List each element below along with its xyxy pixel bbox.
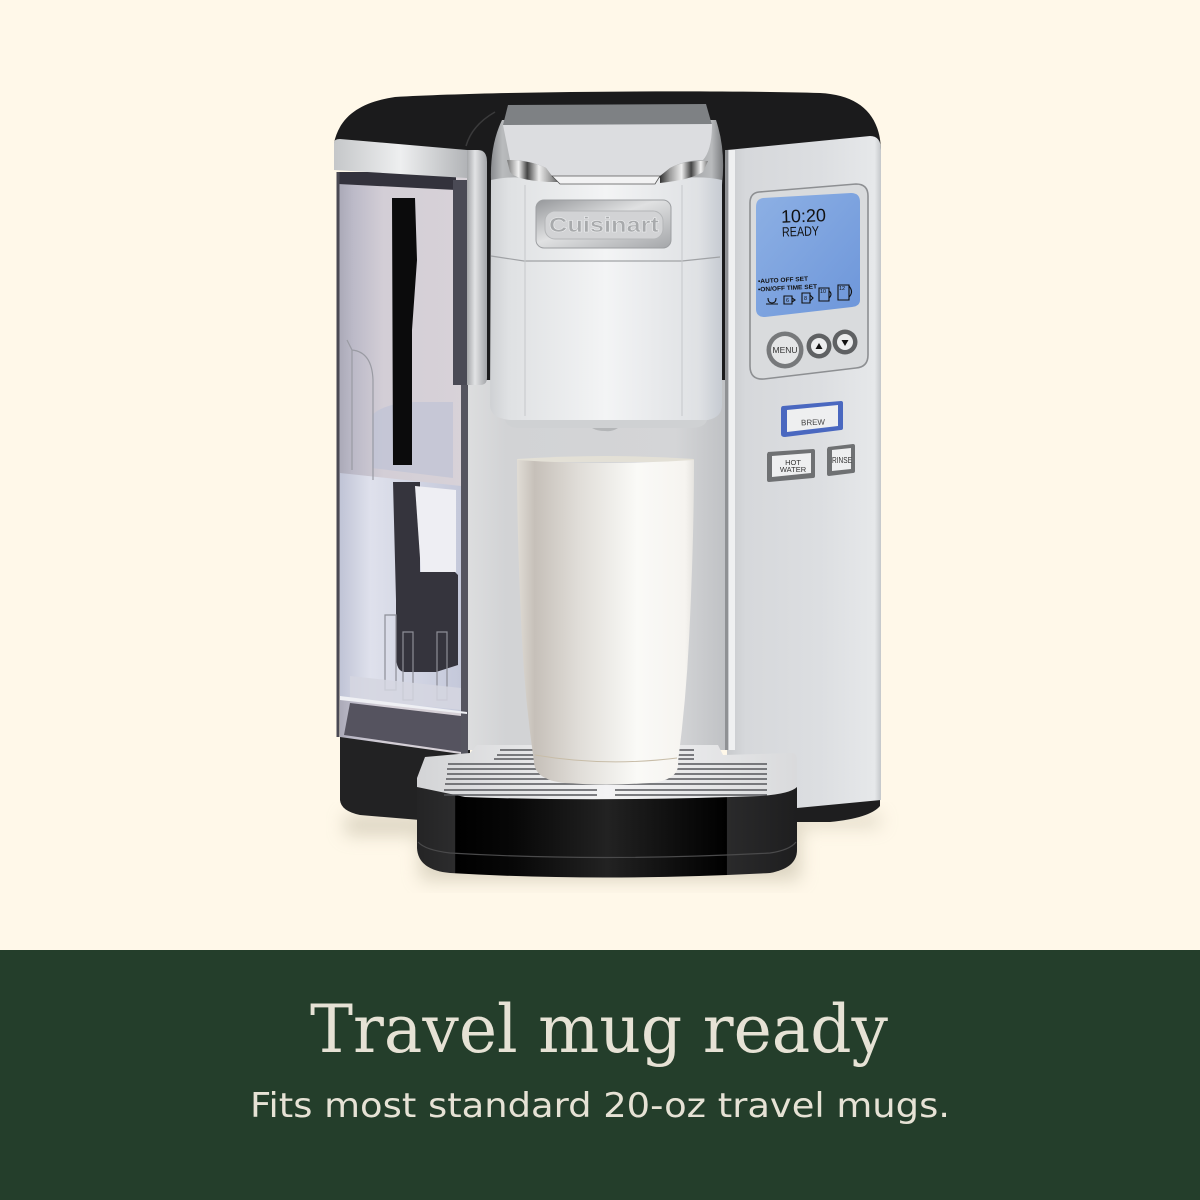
chrome lip left (507, 160, 565, 182)
head body (490, 177, 722, 420)
housing curve highlight (466, 112, 495, 146)
chrome lip right (660, 161, 708, 183)
clock: 10:20 (781, 205, 826, 227)
drip tray (417, 745, 797, 878)
heading: Travel mug ready (310, 991, 889, 1068)
rinse button: RINSE (832, 456, 852, 465)
hot water button (767, 449, 815, 482)
menu button (766, 332, 804, 368)
cup size numbers: 10 (820, 289, 826, 295)
water upper haze (372, 402, 453, 478)
logo badge (536, 200, 671, 248)
tray front (417, 787, 797, 878)
water volume (340, 473, 461, 712)
logo badge: Cuisinart (549, 214, 659, 237)
background (0, 0, 1200, 950)
subheading: Fits most standard 20-oz travel mugs. (250, 1086, 950, 1126)
left top metal band (334, 139, 467, 178)
water tank (338, 172, 468, 755)
LCD screen (756, 193, 860, 317)
auto off label: •AUTO OFF SET (758, 276, 808, 285)
black top housing (334, 91, 881, 385)
mug rim (517, 456, 694, 462)
spout (505, 420, 707, 428)
cup size icons (766, 285, 852, 304)
down button (832, 330, 858, 354)
head seam (491, 256, 720, 261)
center silver backplate (466, 380, 728, 750)
cup size numbers: 6 (786, 298, 789, 304)
black base left (340, 730, 470, 820)
up button (806, 334, 832, 358)
mug body (517, 460, 694, 784)
travel mug (517, 456, 694, 784)
rinse button (827, 444, 855, 476)
menu button: MENU (772, 345, 798, 355)
cup size numbers: 12 (839, 286, 845, 292)
grate lines (444, 750, 767, 795)
hot water button: HOT (785, 458, 801, 467)
lid handle wire (347, 340, 373, 480)
brew button: BREW (801, 418, 826, 427)
inner filter block (393, 482, 458, 672)
coffee maker (334, 91, 881, 880)
lid top (503, 104, 712, 125)
lid face (503, 124, 712, 176)
black base right (790, 790, 880, 822)
brew head (490, 104, 723, 431)
water base plate (350, 676, 461, 710)
right control panel (725, 136, 881, 808)
ground shadow (345, 815, 880, 880)
chrome lip center (552, 176, 660, 184)
head shoulder (491, 120, 723, 185)
mug base seam (535, 755, 677, 762)
handle strip (392, 198, 417, 465)
tank lower dark (344, 703, 461, 752)
display bezel (750, 184, 868, 379)
cup size numbers (786, 286, 845, 304)
footer band (0, 950, 1200, 1200)
hot water button: WATER (780, 465, 807, 474)
front post (467, 150, 487, 385)
status text: READY (782, 223, 819, 240)
on off label: •ON/OFF TIME SET (758, 283, 817, 294)
cup size numbers: 8 (804, 296, 807, 302)
tray top (417, 745, 797, 799)
valve details (385, 615, 447, 700)
brew button (781, 401, 843, 437)
